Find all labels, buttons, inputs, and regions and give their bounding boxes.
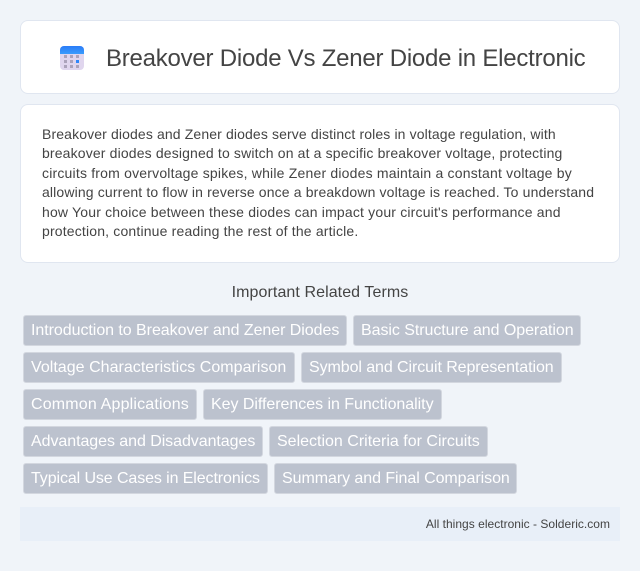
text block: description: protection, continue reading the rest of the article. [42,223,358,239]
chip [274,463,517,494]
chip: Basic Structure and Operation [361,322,574,339]
icon: calendar [60,46,84,70]
text block: description: circuits from overvoltage spikes, while Zener diodes maintain a constant voltage by [42,165,572,181]
chip: Common Applications [31,396,189,413]
chip [203,389,442,420]
panel: description [20,104,620,263]
title: Breakover Diode Vs Zener Diode in Electronic [106,45,585,72]
chip [353,315,581,346]
chip: Summary and Final Comparison [282,470,510,487]
chip: Typical Use Cases in Electronics [31,470,260,487]
chip: Key Differences in Functionality [211,396,434,413]
text block: description: how Your choice between these diodes can impact your circuit's performance and [42,204,561,220]
text block: description [42,126,594,239]
footer [20,507,620,541]
chip [23,352,295,383]
chip [301,352,562,383]
heading: important related terms: Important Related Terms [232,284,408,301]
chip: Introduction to Breakover and Zener Diodes [31,322,339,339]
chip [23,389,197,420]
chip [23,315,347,346]
chip: Selection Criteria for Circuits [277,433,480,450]
chip [23,463,268,494]
chip: Advantages and Disadvantages [31,433,255,450]
footer: All things electronic - Solderic.com [426,517,610,531]
chip [23,426,263,457]
chip [269,426,488,457]
text block: description: Breakover diodes and Zener diodes serve distinct roles in voltage regulation, with [42,126,556,142]
chip: Voltage Characteristics Comparison [31,359,286,376]
chip: Symbol and Circuit Representation [309,359,554,376]
panel: related terms chips [23,315,581,494]
text block: description: allowing current to flow in reverse once a breakdown voltage is reached. To understand [42,184,594,200]
text block: description: breakover diodes designed to switch on at a specific breakover voltage, protecting [42,145,562,161]
panel: title card [20,20,620,94]
